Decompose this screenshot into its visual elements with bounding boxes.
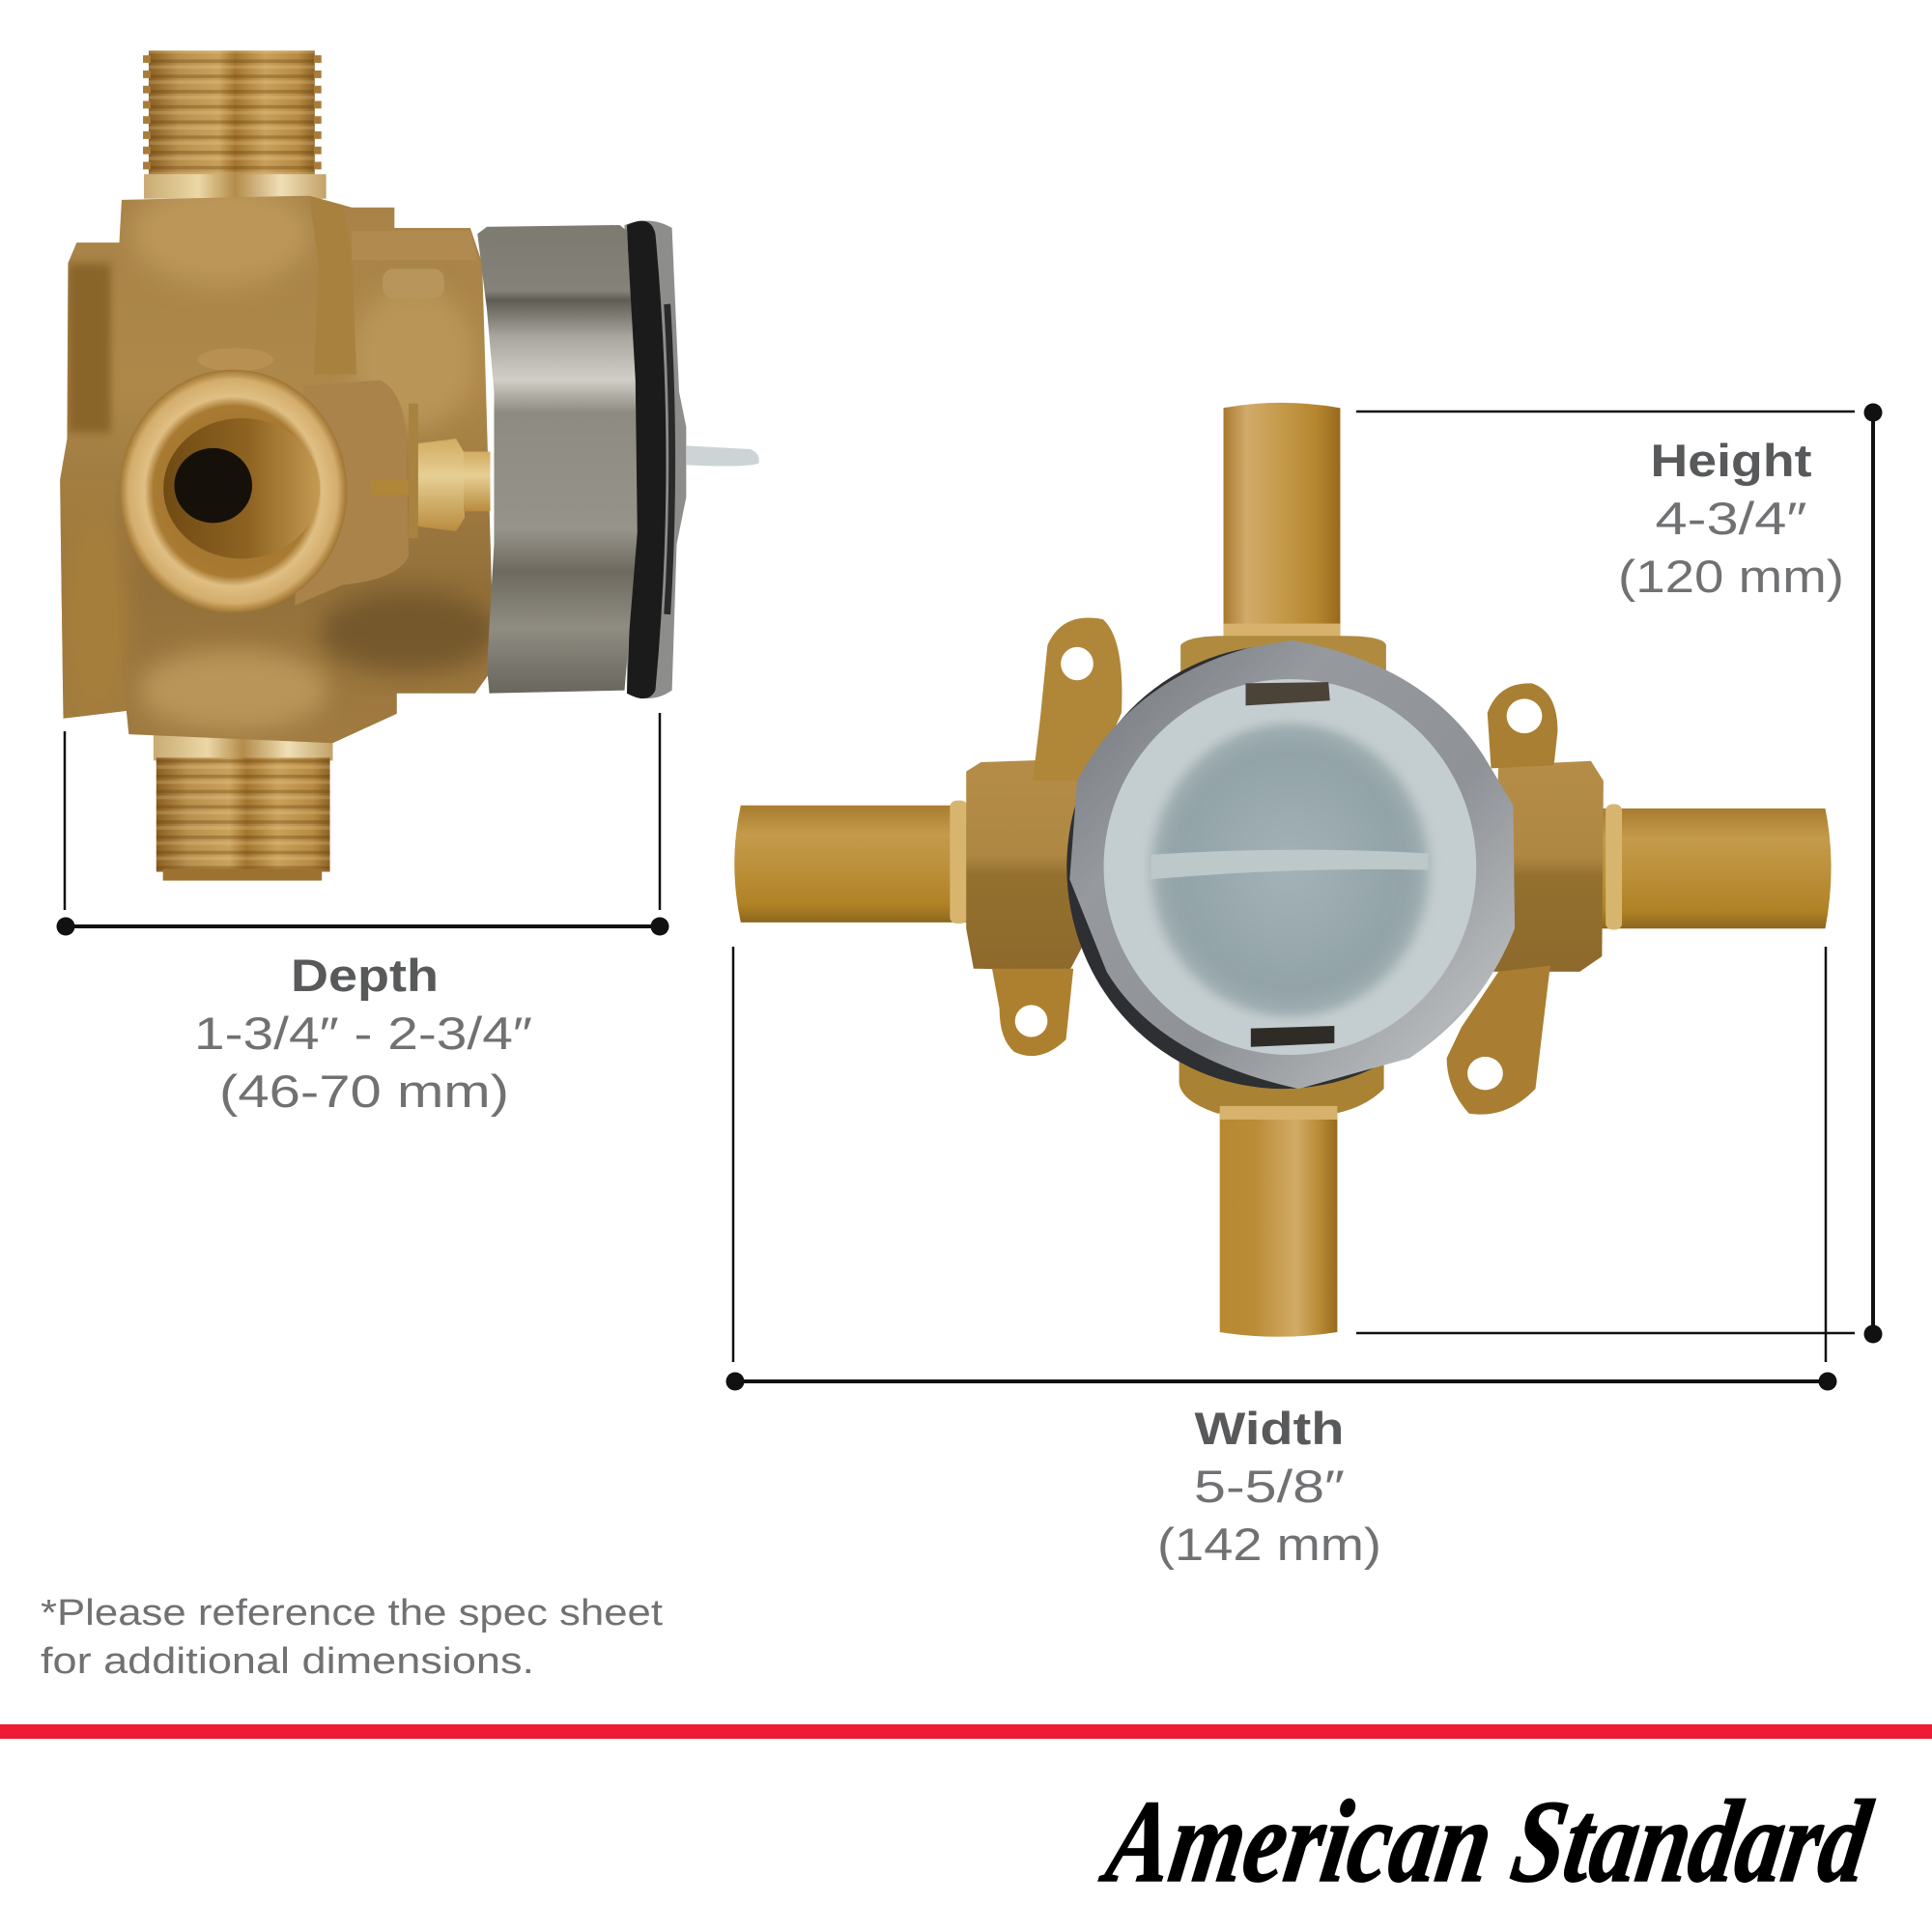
height label: 4-3/4″ [1656, 493, 1806, 544]
top clip [1245, 682, 1330, 705]
metal ring [1069, 640, 1515, 1089]
bottom threaded pipe [154, 734, 332, 881]
footnote [41, 1593, 664, 1682]
mounting ear bottom left [992, 969, 1073, 1056]
width label: (142 mm) [1157, 1519, 1381, 1570]
width label: Width [1194, 1403, 1345, 1454]
bottom clip [1251, 1026, 1334, 1047]
inner dish [1151, 724, 1429, 1016]
small brass fitting [371, 404, 491, 538]
white stem [686, 445, 759, 467]
width label: 5-5/8″ [1194, 1461, 1345, 1512]
front view valve photo [734, 403, 1832, 1337]
port opening [174, 448, 252, 523]
grey plastic cap [1104, 679, 1476, 1055]
top threaded pipe [144, 50, 327, 199]
depth label: (46-70 mm) [219, 1065, 509, 1117]
dimension: height [1356, 404, 1882, 1343]
dimension: depth [56, 713, 668, 935]
left tube collar [950, 801, 968, 923]
bottom tube rim [1220, 1106, 1337, 1120]
depth label: Depth [291, 950, 439, 1001]
mounting ear top left [1033, 618, 1122, 781]
mounting ear bottom right [1447, 966, 1550, 1115]
left tube [734, 806, 970, 923]
divider bar [1151, 850, 1429, 879]
red divider bar [0, 1724, 1932, 1739]
logo: American Standard [1094, 1776, 1879, 1907]
side port [119, 348, 409, 613]
logo: American Standard: American [1094, 1776, 1501, 1907]
height label [1618, 435, 1844, 602]
cast brass body [58, 182, 498, 749]
dark gasket [1066, 645, 1498, 1089]
width label [1157, 1403, 1381, 1570]
dimension: width [726, 947, 1837, 1391]
top tube rim [1224, 624, 1340, 639]
top tube [1224, 403, 1340, 639]
height label: Height [1650, 435, 1812, 486]
mounting ear top right [1488, 683, 1557, 768]
right body block [1492, 761, 1604, 972]
bottom tube [1220, 1107, 1337, 1337]
right tube [1595, 809, 1832, 928]
left body block [966, 759, 1099, 971]
plate and o-ring [625, 220, 686, 698]
footnote: *Please reference the spec sheet [41, 1593, 664, 1634]
bottom collar [1179, 1052, 1384, 1114]
side view valve photo [58, 50, 759, 881]
depth label [194, 950, 532, 1117]
top collar [1180, 636, 1386, 682]
metal hex nut [477, 225, 638, 694]
height label: (120 mm) [1618, 551, 1844, 602]
depth label: 1-3/4″ - 2-3/4″ [194, 1008, 532, 1059]
right tube collar [1605, 804, 1622, 930]
footnote: for additional dimensions. [41, 1641, 534, 1682]
